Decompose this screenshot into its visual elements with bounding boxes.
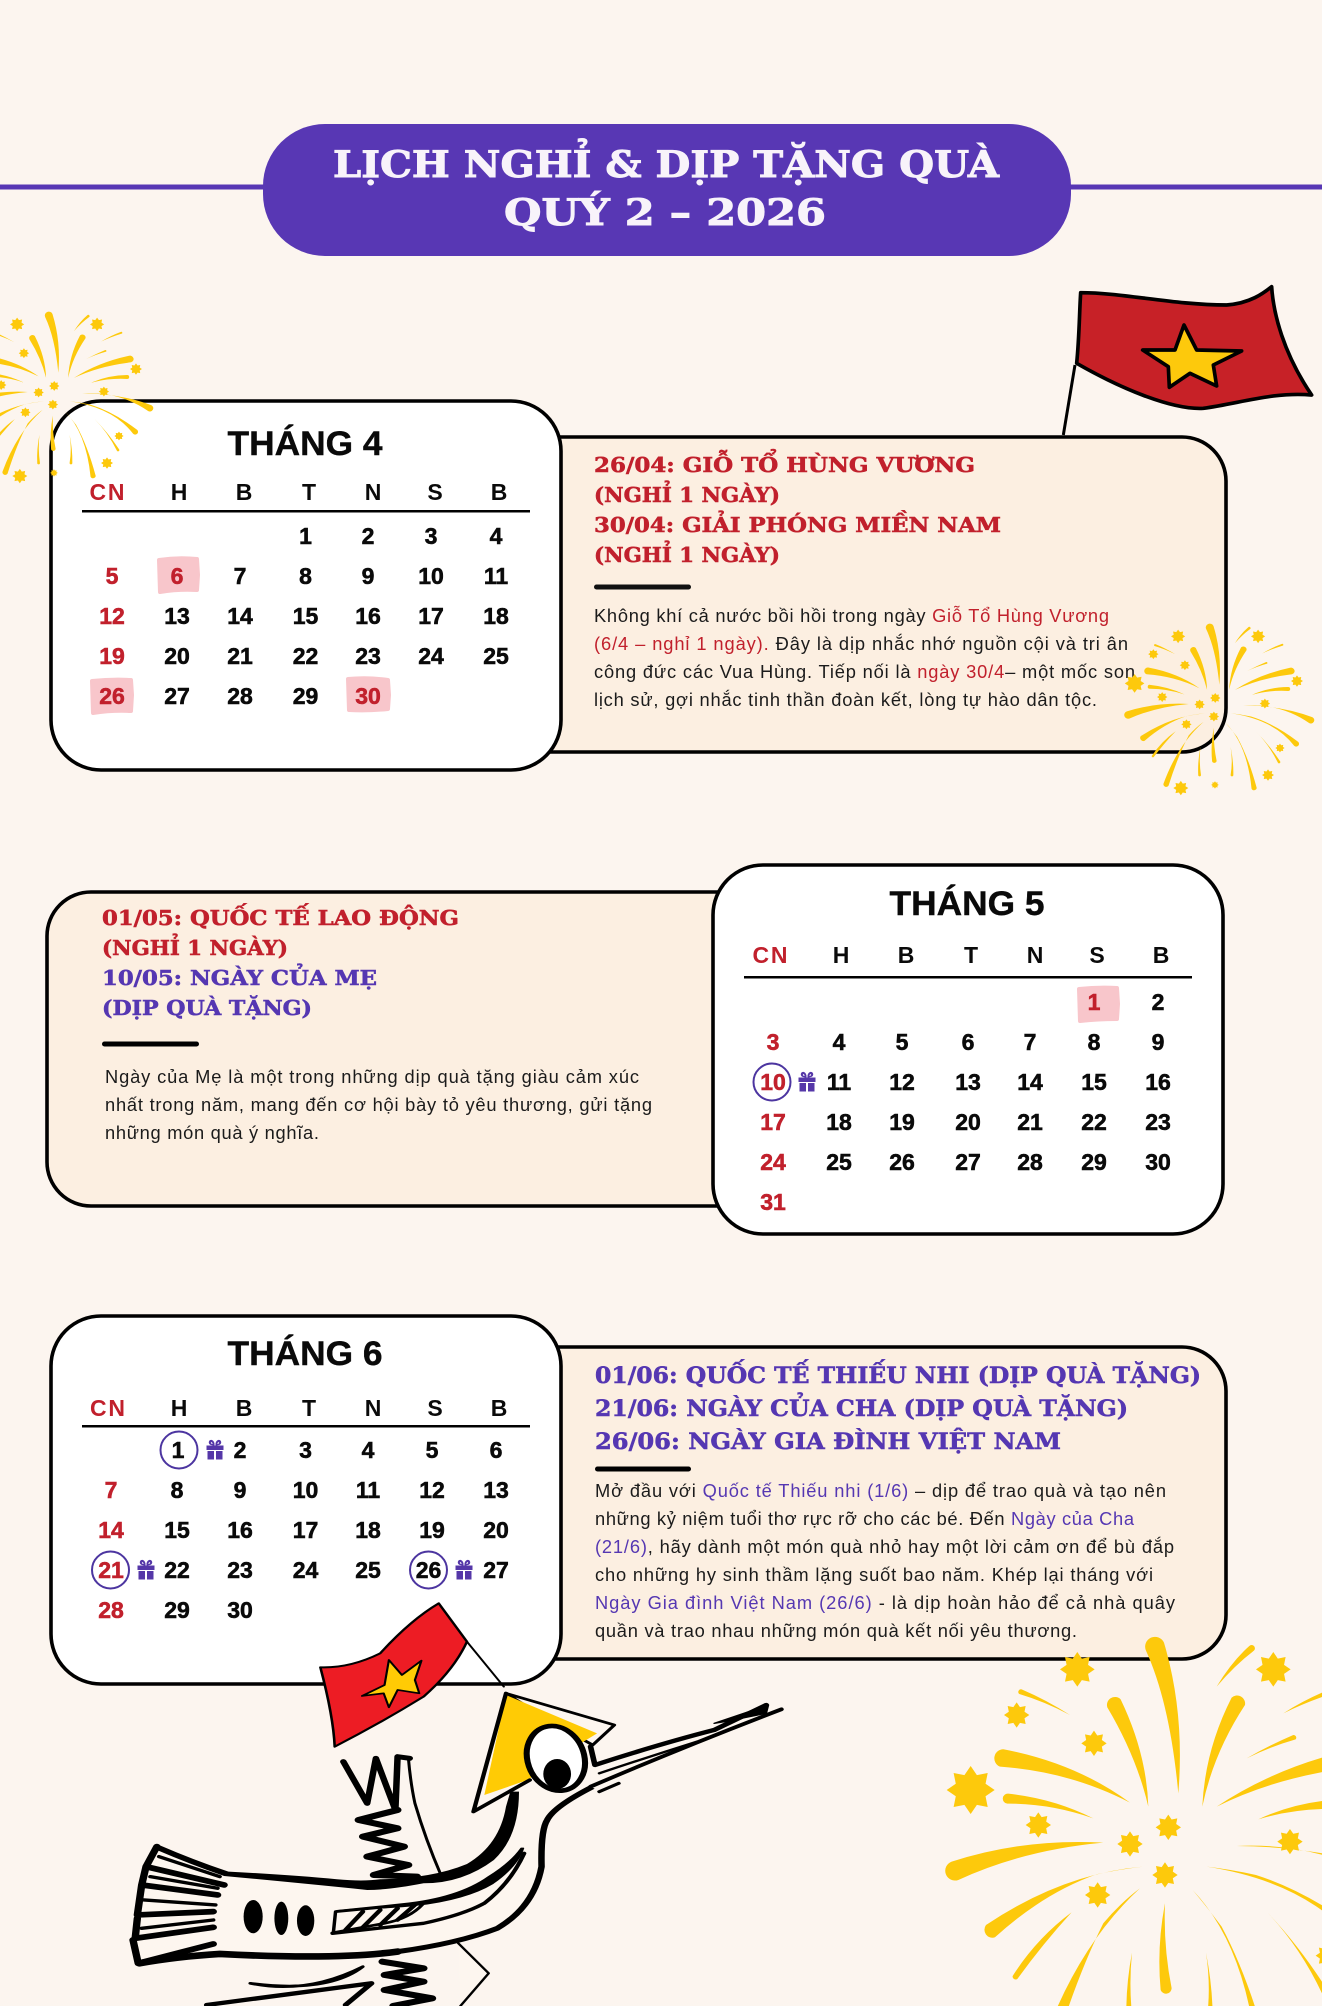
weekday header: B xyxy=(898,942,914,968)
April dates: 13 xyxy=(164,603,190,629)
April heading: 26/04: GIỖ TỔ HÙNG VƯƠNG xyxy=(594,448,975,477)
June body text: (21/6), hãy dành một món quà nhỏ hay một lời cảm ơn để bù đắp xyxy=(595,1536,1174,1557)
holiday highlight xyxy=(1079,988,1118,1021)
holiday highlights xyxy=(92,558,389,713)
legs xyxy=(458,1943,489,2006)
Mother's Day marker xyxy=(754,1064,790,1100)
May dates: 25 xyxy=(826,1149,852,1175)
title banner xyxy=(0,124,1322,256)
May dates: 3 xyxy=(767,1029,779,1055)
June dates: 30 xyxy=(227,1597,253,1623)
April dates: 1 xyxy=(299,523,312,549)
May dates: 29 xyxy=(1081,1149,1107,1175)
April dates: 20 xyxy=(164,643,190,669)
June body text: Ngày Gia đình Việt Nam (26/6) - là dịp hoàn hảo để cả nhà quây xyxy=(595,1592,1176,1613)
June dates: 27 xyxy=(483,1557,509,1583)
April heading: (NGHỈ 1 NGÀY) xyxy=(594,480,780,507)
June dates: 6 xyxy=(490,1437,502,1463)
calendar: June xyxy=(51,1316,561,1684)
calendar: May xyxy=(713,865,1223,1234)
April dates: 10 xyxy=(418,563,444,589)
May dates: 1 xyxy=(1088,989,1101,1015)
May body text: những món quà ý nghĩa. xyxy=(105,1122,319,1143)
April dates: 12 xyxy=(99,603,125,629)
May body text: nhất trong năm, mang đến cơ hội bày tỏ yêu thương, gửi tặng xyxy=(105,1094,652,1115)
June dates: 23 xyxy=(227,1557,253,1583)
May dates: 21 xyxy=(1017,1109,1043,1135)
calendar: May: THÁNG 5 xyxy=(890,885,1044,923)
May dates: 30 xyxy=(1145,1149,1171,1175)
weekday header: CN xyxy=(752,942,788,968)
April dates: 24 xyxy=(418,643,444,669)
icon: gift xyxy=(798,1072,816,1092)
April dates: 23 xyxy=(355,643,381,669)
firework: middle right xyxy=(1124,624,1314,795)
gift day markers xyxy=(92,1432,472,1588)
tail feathers xyxy=(133,1847,224,1963)
April body text xyxy=(594,605,1135,710)
June dates: 1 xyxy=(172,1437,185,1463)
weekday header: N xyxy=(1027,942,1043,968)
weekday header: B xyxy=(491,1395,507,1421)
April dates: 29 xyxy=(293,683,318,709)
April dates: 26 xyxy=(99,683,125,709)
May dates: 6 xyxy=(962,1029,974,1055)
weekday header: T xyxy=(964,942,978,968)
illustration: crane with hat and flag xyxy=(133,1603,781,2006)
May dates: 7 xyxy=(1024,1029,1036,1055)
firework: bottom right xyxy=(945,1637,1322,2006)
eye xyxy=(520,1722,591,1794)
May dates: 16 xyxy=(1145,1069,1171,1095)
weekday header: H xyxy=(833,942,849,968)
May dates: 11 xyxy=(827,1069,851,1095)
May dates: 9 xyxy=(1152,1029,1164,1055)
beak xyxy=(591,1703,781,1792)
April dates: 18 xyxy=(483,603,509,629)
June heading: 21/06: NGÀY CỦA CHA (DỊP QUÀ TẶNG) xyxy=(595,1392,1128,1422)
weekday header xyxy=(744,942,1192,978)
icon: flag on pole xyxy=(1063,287,1312,435)
panel: April notes xyxy=(480,437,1226,752)
May heading: (NGHỈ 1 NGÀY) xyxy=(102,933,288,960)
June dates xyxy=(98,1437,509,1623)
June dates: 15 xyxy=(164,1517,190,1543)
April body text: công đức các Vua Hùng. Tiếp nối là ngày 30/4– một mốc son xyxy=(594,661,1135,682)
April dates: 16 xyxy=(355,603,381,629)
firework: top left xyxy=(0,312,153,483)
calendar: April: THÁNG 4 xyxy=(228,425,383,463)
June dates: 14 xyxy=(98,1517,124,1543)
June dates: 8 xyxy=(171,1477,184,1503)
April heading: (NGHỈ 1 NGÀY) xyxy=(594,540,780,567)
May dates: 12 xyxy=(889,1069,915,1095)
June dates: 12 xyxy=(419,1477,445,1503)
weekday header: CN xyxy=(90,479,124,505)
May dates: 13 xyxy=(955,1069,981,1095)
May heading: (DỊP QUÀ TẶNG) xyxy=(102,995,312,1020)
title text: LỊCH NGHỈ & DỊP TẶNG QUÀ xyxy=(333,139,1000,186)
May dates: 5 xyxy=(896,1029,909,1055)
calendar: April xyxy=(51,401,561,770)
May dates: 4 xyxy=(833,1029,846,1055)
June dates: 25 xyxy=(355,1557,381,1583)
title text xyxy=(333,139,1000,234)
April dates: 30 xyxy=(355,683,381,709)
bird body xyxy=(133,1757,593,2006)
weekday header: B xyxy=(1153,942,1169,968)
April dates: 9 xyxy=(362,563,374,589)
May dates: 24 xyxy=(760,1149,786,1175)
May dates: 17 xyxy=(760,1109,786,1135)
weekday header: B xyxy=(236,1395,252,1421)
weekday header: B xyxy=(491,479,507,505)
weekday header: B xyxy=(236,479,252,505)
conical hat xyxy=(473,1693,614,1812)
June dates: 13 xyxy=(483,1477,509,1503)
title text: QUÝ 2 – 2026 xyxy=(504,192,826,234)
weekday header: CN xyxy=(90,1395,125,1421)
May body text: Ngày của Mẹ là một trong những dịp quà tặng giàu cảm xúc xyxy=(105,1066,639,1087)
April dates: 11 xyxy=(484,563,508,589)
June body text: cho những hy sinh thầm lặng suốt bao năm. Khép lại tháng với xyxy=(595,1564,1153,1585)
June dates: 16 xyxy=(227,1517,253,1543)
April dates: 22 xyxy=(293,643,318,669)
panel: May notes xyxy=(47,892,767,1206)
June body text: Mở đầu với Quốc tế Thiếu nhi (1/6) – dịp để trao quà và tạo nên xyxy=(595,1480,1166,1501)
June heading: 01/06: QUỐC TẾ THIẾU NHI (DỊP QUÀ TẶNG) xyxy=(595,1359,1201,1389)
May dates: 15 xyxy=(1081,1069,1107,1095)
June dates: 21 xyxy=(98,1557,124,1583)
April dates: 7 xyxy=(234,563,246,589)
May heading: 10/05: NGÀY CỦA MẸ xyxy=(102,962,377,990)
May dates xyxy=(760,989,1171,1215)
June dates: 20 xyxy=(483,1517,509,1543)
weekday header: S xyxy=(427,1395,443,1421)
June dates: 11 xyxy=(356,1477,380,1503)
May heading: 01/05: QUỐC TẾ LAO ĐỘNG xyxy=(102,903,459,930)
April body text: lịch sử, gợi nhắc tinh thần đoàn kết, lòng tự hào dân tộc. xyxy=(594,689,1097,710)
June dates: 3 xyxy=(299,1437,312,1463)
raised feathers xyxy=(408,1758,441,1875)
June dates: 17 xyxy=(293,1517,318,1543)
weekday header: N xyxy=(365,1395,381,1421)
weekday header: S xyxy=(427,479,443,505)
May dates: 23 xyxy=(1145,1109,1171,1135)
April dates: 5 xyxy=(106,563,119,589)
May dates: 28 xyxy=(1017,1149,1043,1175)
April dates: 25 xyxy=(483,643,509,669)
June body text: những kỷ niệm tuổi thơ rực rỡ cho các bé. Đến Ngày của Cha xyxy=(595,1508,1135,1529)
panel: June notes xyxy=(480,1347,1226,1659)
April dates: 8 xyxy=(299,563,312,589)
June dates: 18 xyxy=(355,1517,381,1543)
April dates: 19 xyxy=(99,643,125,669)
April dates: 15 xyxy=(293,603,318,629)
weekday header: T xyxy=(302,1395,316,1421)
June dates: 26 xyxy=(416,1557,441,1583)
June body text xyxy=(595,1480,1176,1641)
small flag xyxy=(320,1603,504,1747)
June dates: 10 xyxy=(293,1477,318,1503)
June dates: 9 xyxy=(234,1477,246,1503)
April dates: 6 xyxy=(171,563,183,589)
May dates: 20 xyxy=(955,1109,981,1135)
May dates: 27 xyxy=(955,1149,981,1175)
June body text: quần và trao nhau những món quà kết nối yêu thương. xyxy=(595,1620,1077,1641)
May dates: 19 xyxy=(889,1109,915,1135)
June dates: 24 xyxy=(293,1557,318,1583)
weekday header: S xyxy=(1089,942,1105,968)
June heading: 26/06: NGÀY GIA ĐÌNH VIỆT NAM xyxy=(595,1428,1061,1455)
April dates: 27 xyxy=(164,683,190,709)
June dates: 19 xyxy=(419,1517,445,1543)
April dates: 2 xyxy=(362,523,374,549)
calendar: June: THÁNG 6 xyxy=(228,1335,382,1373)
May dates: 26 xyxy=(889,1149,915,1175)
weekday header: T xyxy=(302,479,316,505)
April heading: 30/04: GIẢI PHÓNG MIỀN NAM xyxy=(594,510,1001,537)
June dates: 5 xyxy=(426,1437,439,1463)
April dates: 17 xyxy=(418,603,444,629)
May dates: 8 xyxy=(1088,1029,1101,1055)
weekday header xyxy=(82,1395,530,1428)
June dates: 4 xyxy=(362,1437,375,1463)
April dates: 21 xyxy=(227,643,253,669)
June dates: 22 xyxy=(164,1557,190,1583)
May heading xyxy=(102,903,459,1020)
May dates: 22 xyxy=(1081,1109,1107,1135)
April dates: 14 xyxy=(227,603,253,629)
May dates: 2 xyxy=(1152,989,1164,1015)
May dates: 18 xyxy=(826,1109,852,1135)
weekday header xyxy=(82,479,530,512)
weekday header: H xyxy=(171,1395,187,1421)
April dates: 3 xyxy=(425,523,437,549)
May dates: 14 xyxy=(1017,1069,1043,1095)
June dates: 2 xyxy=(234,1437,246,1463)
June dates: 28 xyxy=(98,1597,124,1623)
April dates: 28 xyxy=(227,683,253,709)
wing markings xyxy=(244,1900,263,1933)
June heading xyxy=(595,1359,1201,1455)
June dates: 29 xyxy=(164,1597,190,1623)
weekday header: N xyxy=(365,479,381,505)
April heading xyxy=(594,448,1001,567)
May dates: 31 xyxy=(760,1189,786,1215)
April dates: 4 xyxy=(490,523,503,549)
April body text: Không khí cả nước bồi hồi trong ngày Giỗ Tổ Hùng Vương xyxy=(594,605,1109,626)
weekday header: H xyxy=(171,479,187,505)
April body text: (6/4 – nghỉ 1 ngày). Đây là dịp nhắc nhớ nguồn cội và tri ân xyxy=(594,633,1128,654)
June dates: 7 xyxy=(105,1477,117,1503)
May dates: 10 xyxy=(760,1069,786,1095)
May body text xyxy=(105,1066,652,1143)
April dates xyxy=(99,523,509,709)
